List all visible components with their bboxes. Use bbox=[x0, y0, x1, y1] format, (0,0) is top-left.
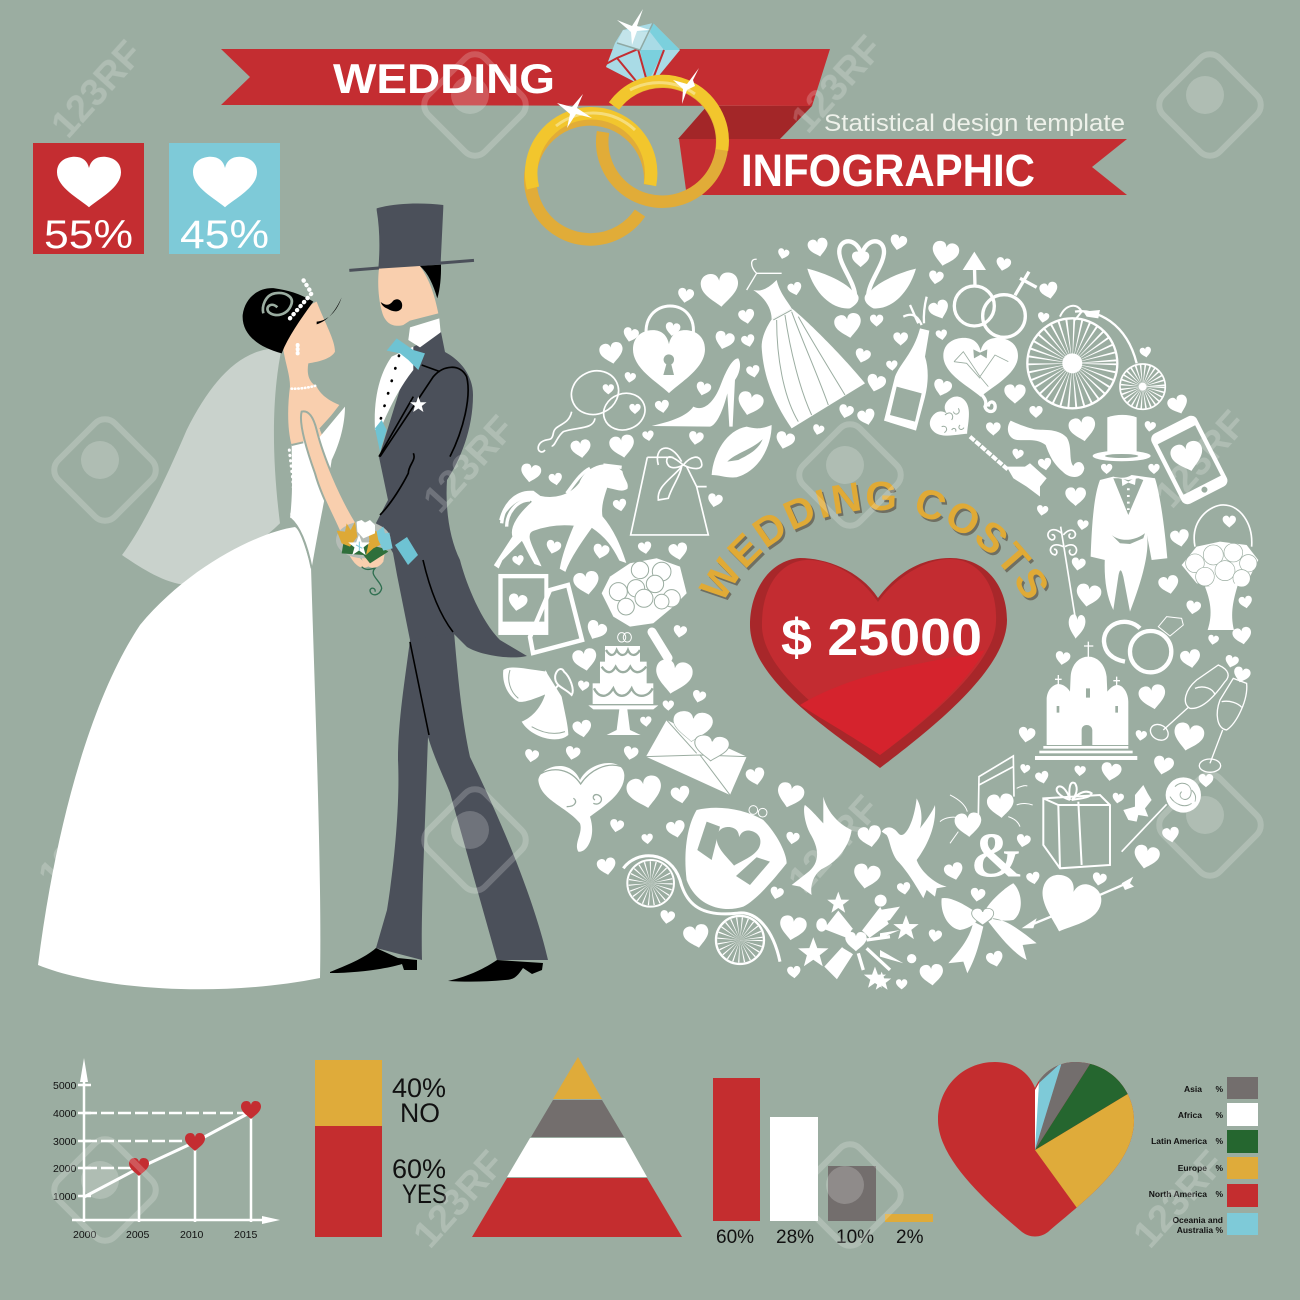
stock watermark stamps: 123RF bbox=[405, 1143, 513, 1256]
stacked bar: yes / no: NO bbox=[400, 1098, 440, 1128]
icon: tailcoat bbox=[1091, 475, 1167, 612]
wreath bottom-left quadrant bbox=[503, 618, 890, 988]
icon: fireworks bbox=[798, 892, 890, 988]
bar chart: 60% bbox=[716, 1227, 754, 1248]
bar chart bbox=[713, 1078, 933, 1248]
veil bbox=[122, 348, 282, 585]
line chart: 2005 bbox=[126, 1229, 150, 1241]
icon: lips bbox=[712, 425, 772, 477]
icon: gift box bbox=[1043, 783, 1110, 868]
line chart: 1000 bbox=[53, 1191, 77, 1203]
icon: bouquet handle bbox=[652, 632, 668, 658]
wedding rings bbox=[530, 81, 723, 239]
icon: ampersand: & bbox=[971, 821, 1023, 891]
legend: % bbox=[1215, 1163, 1223, 1173]
skirt bbox=[38, 527, 320, 989]
line chart bbox=[53, 1058, 280, 1241]
stock watermark stamps: 123RF bbox=[30, 783, 138, 896]
icon: moustache bbox=[1008, 421, 1084, 477]
icon: top hat bbox=[1093, 415, 1151, 461]
icon: dove right bbox=[882, 798, 947, 898]
icon: penny-farthing bicycle bbox=[1027, 306, 1165, 409]
heart pie chart bbox=[938, 1062, 1134, 1236]
stacked bar: yes / no: 60% bbox=[392, 1154, 446, 1184]
icon: heart with arrow bbox=[1022, 870, 1134, 942]
icon: wedding cake bbox=[588, 633, 658, 735]
legend: North America bbox=[1149, 1189, 1207, 1199]
icon: horse bbox=[495, 465, 627, 571]
icon: curly plant bbox=[1048, 527, 1077, 627]
legend: Asia bbox=[1184, 1084, 1202, 1094]
legend: Africa bbox=[1178, 1110, 1202, 1120]
title ribbon: WEDDING bbox=[221, 49, 830, 106]
line chart: 2010 bbox=[180, 1229, 204, 1241]
stat box: 55% bbox=[33, 143, 144, 257]
icon: swans bbox=[807, 241, 916, 308]
icon wreath bbox=[495, 234, 1258, 990]
icon: champagne glasses bbox=[1148, 665, 1247, 772]
title ribbon: INFOGRAPHIC bbox=[679, 139, 1127, 196]
title ribbon: WEDDING: WEDDING bbox=[333, 55, 555, 102]
subtitle: Statistical design template bbox=[824, 110, 1125, 137]
line chart: 2000 bbox=[53, 1163, 77, 1175]
stacked bar: yes / no: YES bbox=[402, 1179, 447, 1209]
icon: tuxedo heart bbox=[943, 338, 1018, 411]
wreath top-left quadrant bbox=[495, 237, 916, 635]
icon: bow bbox=[941, 883, 1037, 973]
icon: music notes bbox=[940, 756, 1033, 843]
legend: Australia % bbox=[1177, 1225, 1223, 1235]
stacked bar: yes / no bbox=[315, 1060, 447, 1237]
icon: love envelope bbox=[646, 710, 747, 795]
icon: champagne bottle bbox=[884, 297, 929, 431]
title ribbon: INFOGRAPHIC: INFOGRAPHIC bbox=[741, 145, 1035, 196]
stat box: 45%: 45% bbox=[180, 213, 269, 257]
line chart: 5000 bbox=[53, 1080, 77, 1092]
icon: balloons bbox=[538, 363, 650, 452]
bride bbox=[38, 277, 370, 989]
legend: Europe bbox=[1178, 1163, 1207, 1173]
legend: % bbox=[1215, 1084, 1223, 1094]
bar chart: 2% bbox=[896, 1227, 924, 1248]
icon: rose bouquet bbox=[602, 558, 687, 627]
centre heart: $ 25000 bbox=[750, 558, 1007, 768]
icon: fireworks right bbox=[872, 907, 919, 990]
icon: wedding bells bbox=[503, 667, 573, 739]
stock watermark stamps: 123RF bbox=[780, 788, 888, 901]
icon: flower basket bbox=[1182, 505, 1258, 630]
line chart: 2000 bbox=[73, 1229, 97, 1241]
scattered hearts bbox=[896, 614, 1253, 989]
icon: smartphone bbox=[1149, 413, 1230, 507]
icon: diamond bbox=[606, 23, 680, 82]
legend: Latin America bbox=[1151, 1136, 1207, 1146]
legend bbox=[1149, 1077, 1258, 1235]
trousers bbox=[376, 620, 548, 960]
legend: % bbox=[1215, 1136, 1223, 1146]
scattered hearts bbox=[512, 237, 887, 597]
pocket square bbox=[395, 537, 418, 565]
legend: % bbox=[1215, 1189, 1223, 1199]
wreath bottom-right quadrant bbox=[872, 614, 1253, 990]
line chart: 3000 bbox=[53, 1136, 77, 1148]
arc heading: WEDDING COSTS: WEDDING COSTS bbox=[698, 482, 1047, 598]
pyramid chart bbox=[472, 1057, 682, 1237]
stat box: 45% bbox=[169, 143, 280, 257]
sparkles bbox=[557, 9, 699, 128]
stat box: 55%: 55% bbox=[44, 213, 133, 257]
icon: dove left bbox=[792, 797, 852, 895]
stacked bar: yes / no: 40% bbox=[392, 1073, 446, 1103]
bouquet bbox=[336, 520, 393, 595]
ribbon fold bbox=[678, 106, 812, 139]
icon: dress on hanger bbox=[747, 259, 865, 428]
centre heart: $ 25000: $ 25000 bbox=[781, 609, 982, 667]
line chart: 2015 bbox=[234, 1229, 258, 1241]
line chart: 4000 bbox=[53, 1108, 77, 1120]
stock watermark stamps: 123RF bbox=[783, 28, 891, 141]
right swan bbox=[862, 241, 916, 308]
icon: high heel bbox=[652, 358, 740, 427]
left swan bbox=[807, 241, 862, 308]
stock watermark stamps: 123RF bbox=[415, 408, 523, 521]
scattered hearts bbox=[524, 618, 883, 979]
stock watermark stamps: 123RF bbox=[43, 33, 151, 146]
upper body bbox=[243, 277, 370, 569]
icon: gender rings bbox=[954, 252, 1037, 337]
icon: church bbox=[1035, 642, 1137, 760]
shoes bbox=[330, 948, 543, 982]
icon: ornate heart bbox=[538, 763, 624, 852]
icon: heart padlock bbox=[633, 306, 705, 393]
icon: polaroid front bbox=[498, 574, 548, 635]
icon: carriage bbox=[623, 806, 787, 964]
tailcoat bbox=[376, 332, 527, 657]
stock watermark stamps: 123RF bbox=[1125, 1143, 1233, 1256]
icon: second polaroid bbox=[530, 585, 582, 653]
groom bbox=[330, 204, 548, 982]
legend: Oceania and bbox=[1172, 1215, 1223, 1225]
scattered hearts bbox=[886, 234, 1253, 615]
bar chart: 10% bbox=[836, 1227, 874, 1248]
wreath top-right quadrant bbox=[884, 234, 1258, 630]
legend: % bbox=[1215, 1110, 1223, 1120]
stock watermark stamps: 123RF bbox=[1147, 403, 1255, 516]
icon: interlocked rings with diamond bbox=[1104, 617, 1183, 672]
trouser and coat lines bbox=[410, 560, 453, 735]
icon: rose bbox=[1122, 777, 1201, 852]
icon: heart wand bbox=[925, 392, 1047, 497]
bar chart: 28% bbox=[776, 1227, 814, 1248]
groom upper body bbox=[349, 204, 474, 515]
arc heading: WEDDING COSTS: WEDDING COSTS bbox=[700, 484, 1049, 600]
icon: gift bag bbox=[631, 448, 708, 535]
